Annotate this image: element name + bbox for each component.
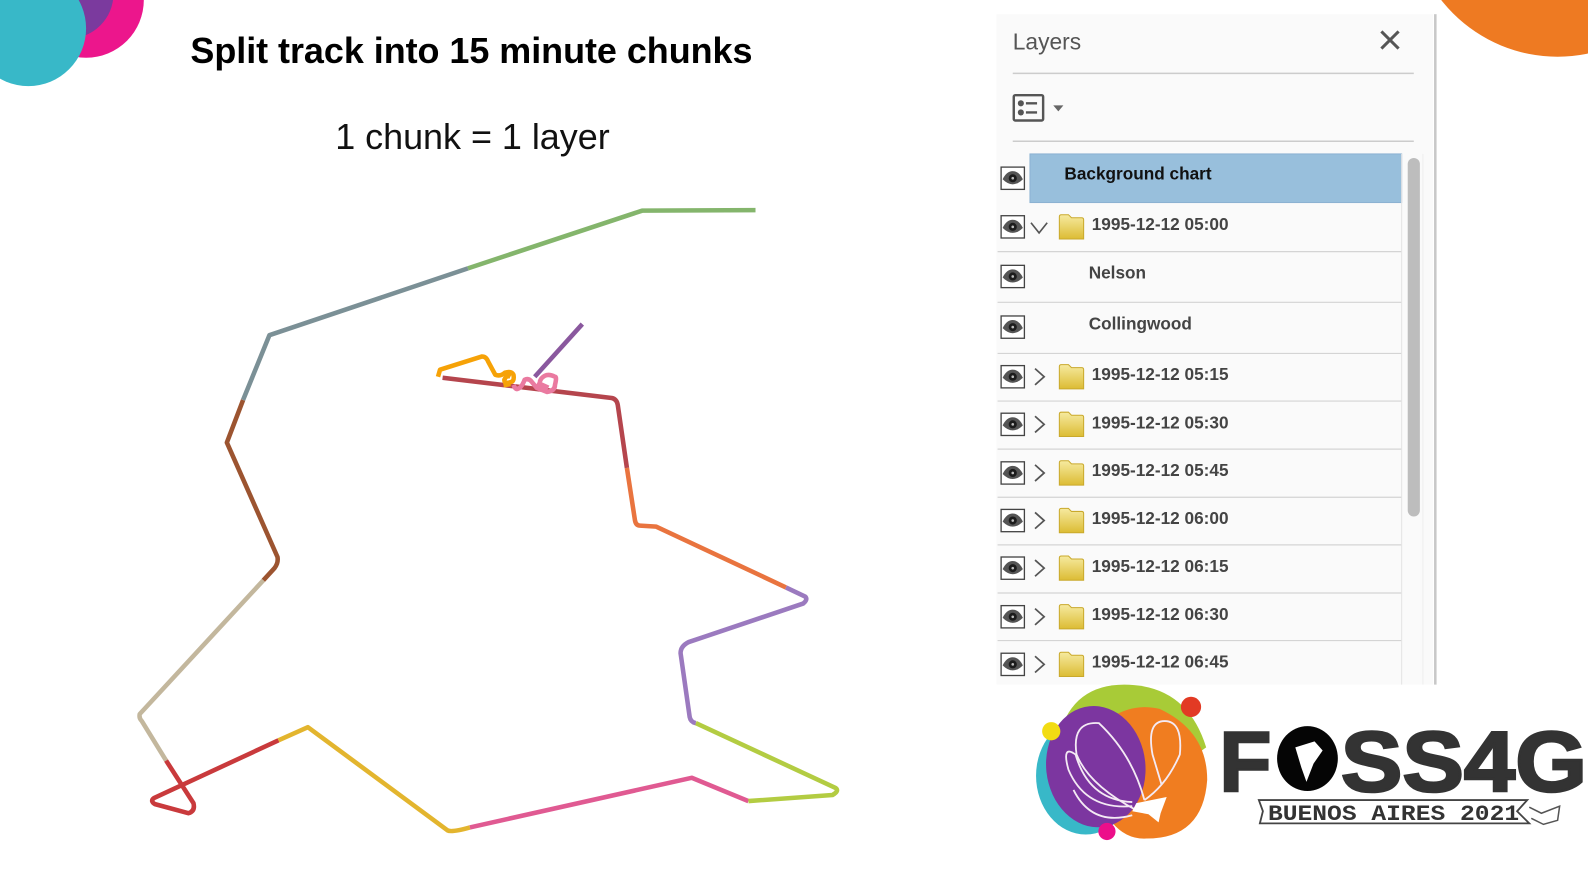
logo banner: BUENOS AIRES 2021 [1268, 801, 1519, 827]
row: 05:30: 1995-12-12 05:30 [1092, 412, 1229, 432]
selected row: background chart [1001, 154, 1402, 203]
decorative circles: top left [0, 0, 144, 86]
row: Nelson [1001, 263, 1146, 288]
row: 05:15 [1001, 364, 1229, 389]
panel: layers [997, 14, 1437, 685]
row: Nelson: Nelson [1089, 263, 1146, 283]
logo wordmark: F [1219, 715, 1271, 810]
logo: FOSS4G Buenos Aires 2021 [1036, 685, 1587, 840]
decorative circle: top right [1410, 0, 1588, 57]
row: 05:30 [1001, 412, 1229, 436]
icon: legend dropdown [1014, 95, 1063, 121]
track chart: coloured chunks [140, 210, 837, 831]
row: Collingwood [1001, 314, 1192, 338]
panel heading: Layers [1013, 29, 1081, 55]
row: 05:15: 1995-12-12 05:15 [1092, 364, 1229, 384]
row: 06:15: 1995-12-12 06:15 [1092, 556, 1229, 576]
logo globe [1277, 726, 1338, 791]
logo mark [1036, 685, 1207, 840]
scrollbar [1408, 158, 1420, 516]
selected row: background chart: Background chart [1064, 163, 1212, 183]
row: Collingwood: Collingwood [1089, 314, 1192, 334]
row: 06:45: 1995-12-12 06:45 [1092, 651, 1229, 671]
row: 06:45 [1001, 651, 1229, 677]
icon: close [1381, 31, 1399, 49]
title: Split track into 15 minute chunks [190, 30, 752, 71]
logo: FOSS4G Buenos Aires 2021: SS4G [1341, 715, 1587, 810]
row: 06:15 [1001, 556, 1229, 580]
row: 05:00: 1995-12-12 05:00 [1092, 214, 1229, 234]
row: 06:00 [1001, 508, 1229, 533]
row: 05:00 [1001, 214, 1229, 239]
row: 06:00: 1995-12-12 06:00 [1092, 508, 1229, 528]
subtitle: 1 chunk = 1 layer [335, 116, 610, 157]
row: 06:30 [1001, 604, 1229, 629]
row: 05:45 [1001, 460, 1229, 485]
row: 06:30: 1995-12-12 06:30 [1092, 604, 1229, 624]
row: 05:45: 1995-12-12 05:45 [1092, 460, 1229, 480]
